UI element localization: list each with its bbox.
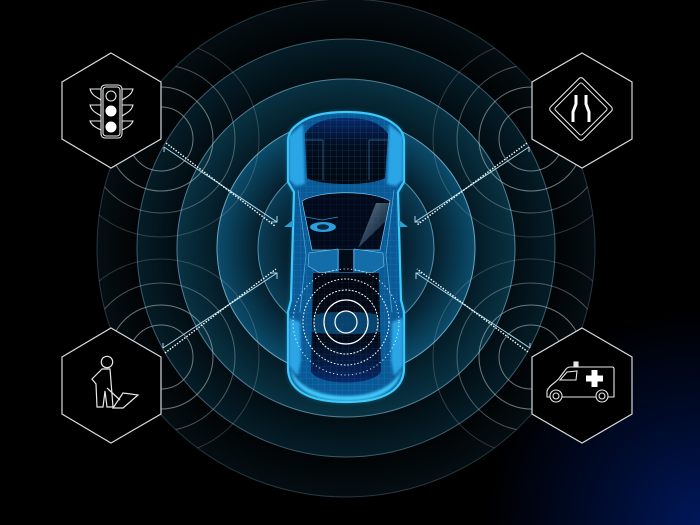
windshield reflection (358, 203, 390, 248)
arrow: top right (415, 143, 529, 225)
steering emblem (306, 217, 338, 232)
car (284, 112, 408, 402)
side lines (298, 190, 394, 312)
front seats (308, 249, 384, 273)
hexagon: road work (62, 328, 161, 443)
hood (305, 118, 388, 184)
rear cabin (311, 273, 381, 382)
icon: traffic light (90, 85, 133, 138)
car glow (288, 112, 404, 402)
hexagon signal arcs (99, 48, 593, 448)
car body (288, 112, 404, 402)
hexagon: road narrows (532, 53, 632, 168)
arrow: bottom left (163, 269, 277, 353)
concentric signal rings (97, 0, 595, 497)
icon: worker with shovel (92, 356, 138, 408)
hexagon: traffic light (62, 53, 161, 168)
rear seats (312, 312, 380, 334)
arrow: top left (164, 143, 277, 226)
hexagon: ambulance (532, 328, 632, 443)
rear bumper glow (290, 368, 402, 401)
mirrors (284, 220, 408, 227)
car bodywork grid (288, 112, 404, 402)
icon: ambulance (547, 362, 614, 402)
icon: road narrows sign (548, 76, 614, 142)
hood panel lines (304, 140, 388, 180)
windshield (302, 193, 390, 250)
front fenders (289, 124, 403, 186)
sensor circles (293, 269, 399, 375)
rear fenders (289, 318, 403, 376)
arrow: bottom right (416, 269, 530, 352)
